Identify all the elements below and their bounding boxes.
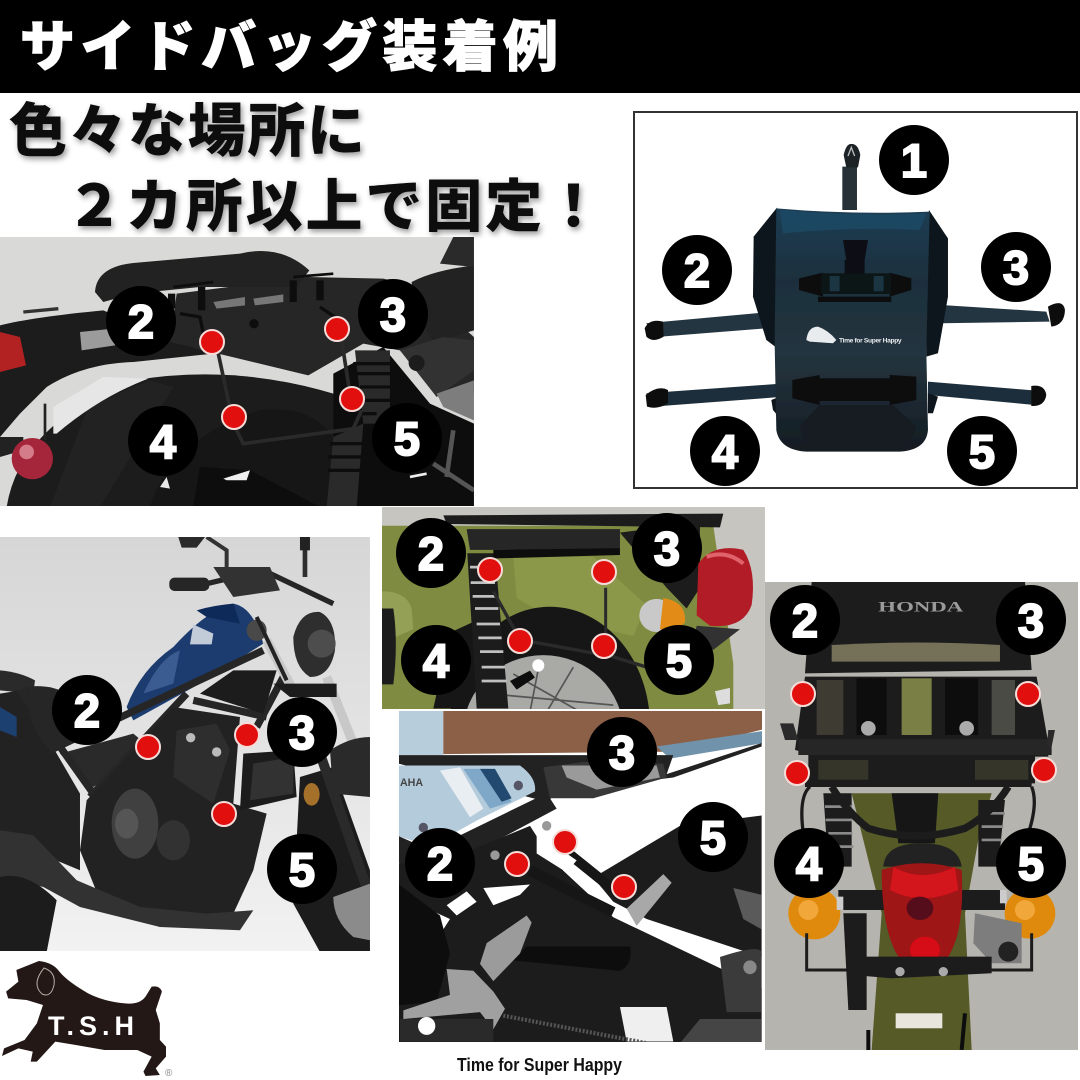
badge 5 [267,834,337,904]
red marker [785,682,1056,785]
badge 4 [401,625,471,695]
badge 2: 2 [418,527,444,580]
badge 4: 4 [712,425,738,478]
bag illustration [645,144,1065,452]
brand tagline: Time for Super Happy [457,1055,622,1075]
badge 2: 2 [792,594,818,647]
badge 2 [662,235,732,305]
badge 3: 3 [609,726,635,779]
badge 4 [128,406,198,476]
panel: photo of green bike rear: HONDA [878,600,964,616]
badge 5 [372,403,442,473]
badge 5: 5 [969,425,995,478]
badge 2 [770,585,840,655]
badge 1 [879,125,949,195]
badge 3: 3 [289,706,315,759]
badge 3: 3 [654,522,680,575]
red marker [200,317,364,429]
panel: bag with numbered straps [634,112,1077,488]
badge 3 [587,717,657,787]
badge 5: 5 [289,843,315,896]
badge 5 [996,828,1066,898]
badge 3: 3 [1003,241,1029,294]
logo: T.S.H dog: T.S.H [48,1011,134,1041]
badge 2: 2 [74,684,100,737]
panel: photo of green bike rear [765,580,1080,1050]
heading: fixing points [9,99,602,239]
badge 5: 5 [1018,837,1044,890]
badge 2 [52,675,122,745]
badge 5: 5 [666,634,692,687]
red marker [478,558,616,658]
badge 3: 3 [1018,594,1044,647]
badge 4: 4 [796,837,822,890]
badge 3: 3 [380,288,406,341]
logo: T.S.H dog [2,961,173,1079]
badge 5 [644,625,714,695]
badge 3 [996,585,1066,655]
badge 4: 4 [423,634,449,687]
badge 2 [405,828,475,898]
heading: fixing points: ２カ所以上で固定！ [66,175,602,239]
badge 3 [358,279,428,349]
panel: photo of green bike side [382,507,765,709]
panel: photo of blue cruiser [0,537,370,952]
bag illustration: Time for Super Happy [839,337,902,344]
badge 4 [774,828,844,898]
panel: photo of cruiser rear with bracket [0,237,474,507]
badge 5 [678,802,748,872]
logo: T.S.H dog: ® [165,1068,173,1079]
badge 5: 5 [394,412,420,465]
badge 2 [396,518,466,588]
title banner [0,0,1080,93]
badge 1: 1 [901,134,927,187]
badge 3 [267,697,337,767]
red marker [505,830,636,899]
badge 4: 4 [150,415,176,468]
red marker [136,723,259,826]
badge 2: 2 [128,295,154,348]
heading: fixing points: 色々な場所に [9,99,365,164]
badge 5: 5 [700,811,726,864]
badge 3 [981,232,1051,302]
badge 2: 2 [427,837,453,890]
badge 2: 2 [684,244,710,297]
badge 5 [947,416,1017,486]
badge 4 [690,416,760,486]
title banner: サイドバッグ装着例 [20,16,558,78]
badge 2 [106,286,176,356]
panel: photo of retro bike rear frame: AHA [400,777,423,789]
panel: photo of retro bike rear frame [397,709,767,1047]
badge 3 [632,513,702,583]
